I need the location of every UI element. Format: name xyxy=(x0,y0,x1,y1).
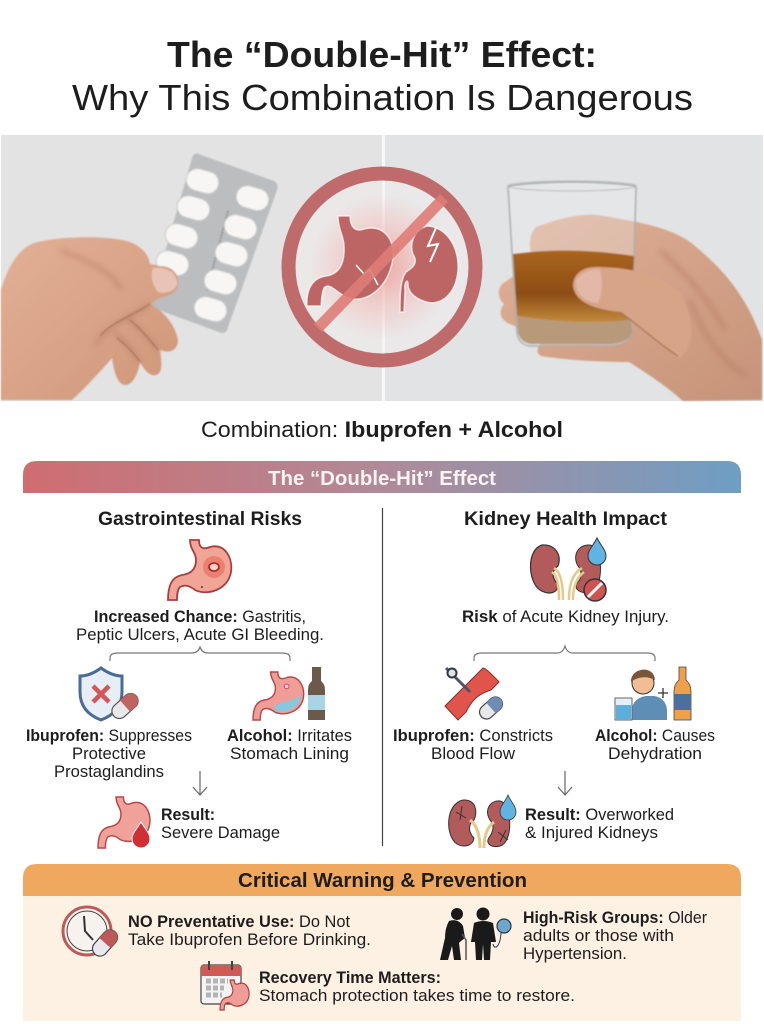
icon: stomach and bottle xyxy=(253,667,325,720)
text: ibuprofen xyxy=(26,727,192,781)
heading bar: Critical Warning & Prevention xyxy=(238,870,527,892)
text: result: Result: xyxy=(161,806,215,824)
text: ibuprofen: Ibuprofen: Suppresses xyxy=(26,727,192,745)
text: no preventative use xyxy=(128,913,371,949)
thumb over glass xyxy=(573,267,691,358)
icon: shield and pill xyxy=(80,668,141,722)
text: increased chance xyxy=(76,608,324,644)
column divider xyxy=(382,508,384,846)
icon: kidneys with drop and prohibit sign xyxy=(530,538,606,601)
text: increased chance: Increased Chance: Gastritis, xyxy=(94,608,306,626)
section banner: Double-Hit Effect xyxy=(23,461,741,493)
text: alcohol xyxy=(595,727,715,763)
right hand behind glass xyxy=(499,215,762,401)
text: high-risk groups: Hypertension. xyxy=(523,945,627,963)
text: ibuprofen: Ibuprofen: Constricts xyxy=(393,727,553,745)
text: alcohol: Stomach Lining xyxy=(230,745,349,763)
heading: Gastrointestinal Risks xyxy=(98,509,302,530)
title: Why This Combination Is Dangerous xyxy=(72,77,693,118)
icon: older adults and blood pressure cuff xyxy=(440,908,511,960)
text: recovery time: Recovery Time Matters: xyxy=(259,969,441,987)
blister pack xyxy=(150,154,278,333)
text: no preventative use: Take Ibuprofen Before Drinking. xyxy=(128,931,371,949)
text: result xyxy=(525,806,674,842)
text: risk: Risk of Acute Kidney Injury. xyxy=(462,608,669,626)
text: recovery time xyxy=(259,969,575,1005)
icon: injured kidneys xyxy=(449,795,516,848)
text: ibuprofen: Blood Flow xyxy=(431,745,515,763)
icon: clock and pill xyxy=(63,907,121,959)
text: alcohol: Alcohol: Irritates xyxy=(227,727,352,745)
arrow xyxy=(193,771,207,795)
text: high-risk groups: High-Risk Groups: Older xyxy=(523,909,707,927)
text: recovery time: Stomach protection takes time to restore. xyxy=(259,987,575,1005)
combination label: Combination: Ibuprofen + Alcohol xyxy=(201,417,563,442)
text: result: & Injured Kidneys xyxy=(525,824,658,842)
text: ibuprofen: Prostaglandins xyxy=(54,763,164,781)
icon: ulcerated stomach xyxy=(168,540,231,600)
text: high-risk groups xyxy=(523,909,707,963)
text: result: Result: Overworked xyxy=(525,806,674,824)
heading: Kidney Health Impact xyxy=(464,509,668,530)
bracket xyxy=(110,647,290,661)
text: increased chance: Peptic Ulcers, Acute GI Bleeding. xyxy=(76,626,324,644)
text: ibuprofen: Protective xyxy=(72,745,146,763)
text: alcohol: Alcohol: Causes xyxy=(595,727,715,745)
section banner: Double-Hit Effect: The “Double-Hit” Effect xyxy=(268,468,496,490)
text: result: Severe Damage xyxy=(161,824,280,842)
text: no preventative use: NO Preventative Use: Do Not xyxy=(128,913,350,931)
bracket xyxy=(474,646,655,661)
text: high-risk groups: adults or those with xyxy=(523,927,674,945)
text: result xyxy=(161,806,280,842)
prohibition symbol over stomach and kidney xyxy=(288,174,476,360)
left hand holding the pills xyxy=(1,237,178,400)
icon: calendar and stomach xyxy=(201,961,249,1010)
text: alcohol: Dehydration xyxy=(608,745,702,763)
whisky glass xyxy=(508,181,636,346)
title: The “Double-Hit” Effect: xyxy=(167,34,597,75)
icon: bleeding stomach xyxy=(98,797,150,848)
arrow xyxy=(558,771,572,795)
text: alcohol xyxy=(227,727,352,763)
hero photo panel xyxy=(1,135,763,401)
icon: dehydrated person with glass and bottle xyxy=(615,667,691,720)
title xyxy=(72,34,693,118)
panel: critical warning and prevention xyxy=(23,864,741,1021)
panel: kidney health impact xyxy=(393,509,715,848)
heading bar xyxy=(23,864,741,896)
icon: constricted vessel and pill xyxy=(445,668,505,722)
text: ibuprofen xyxy=(393,727,553,763)
panel: gastrointestinal risks xyxy=(26,509,352,848)
